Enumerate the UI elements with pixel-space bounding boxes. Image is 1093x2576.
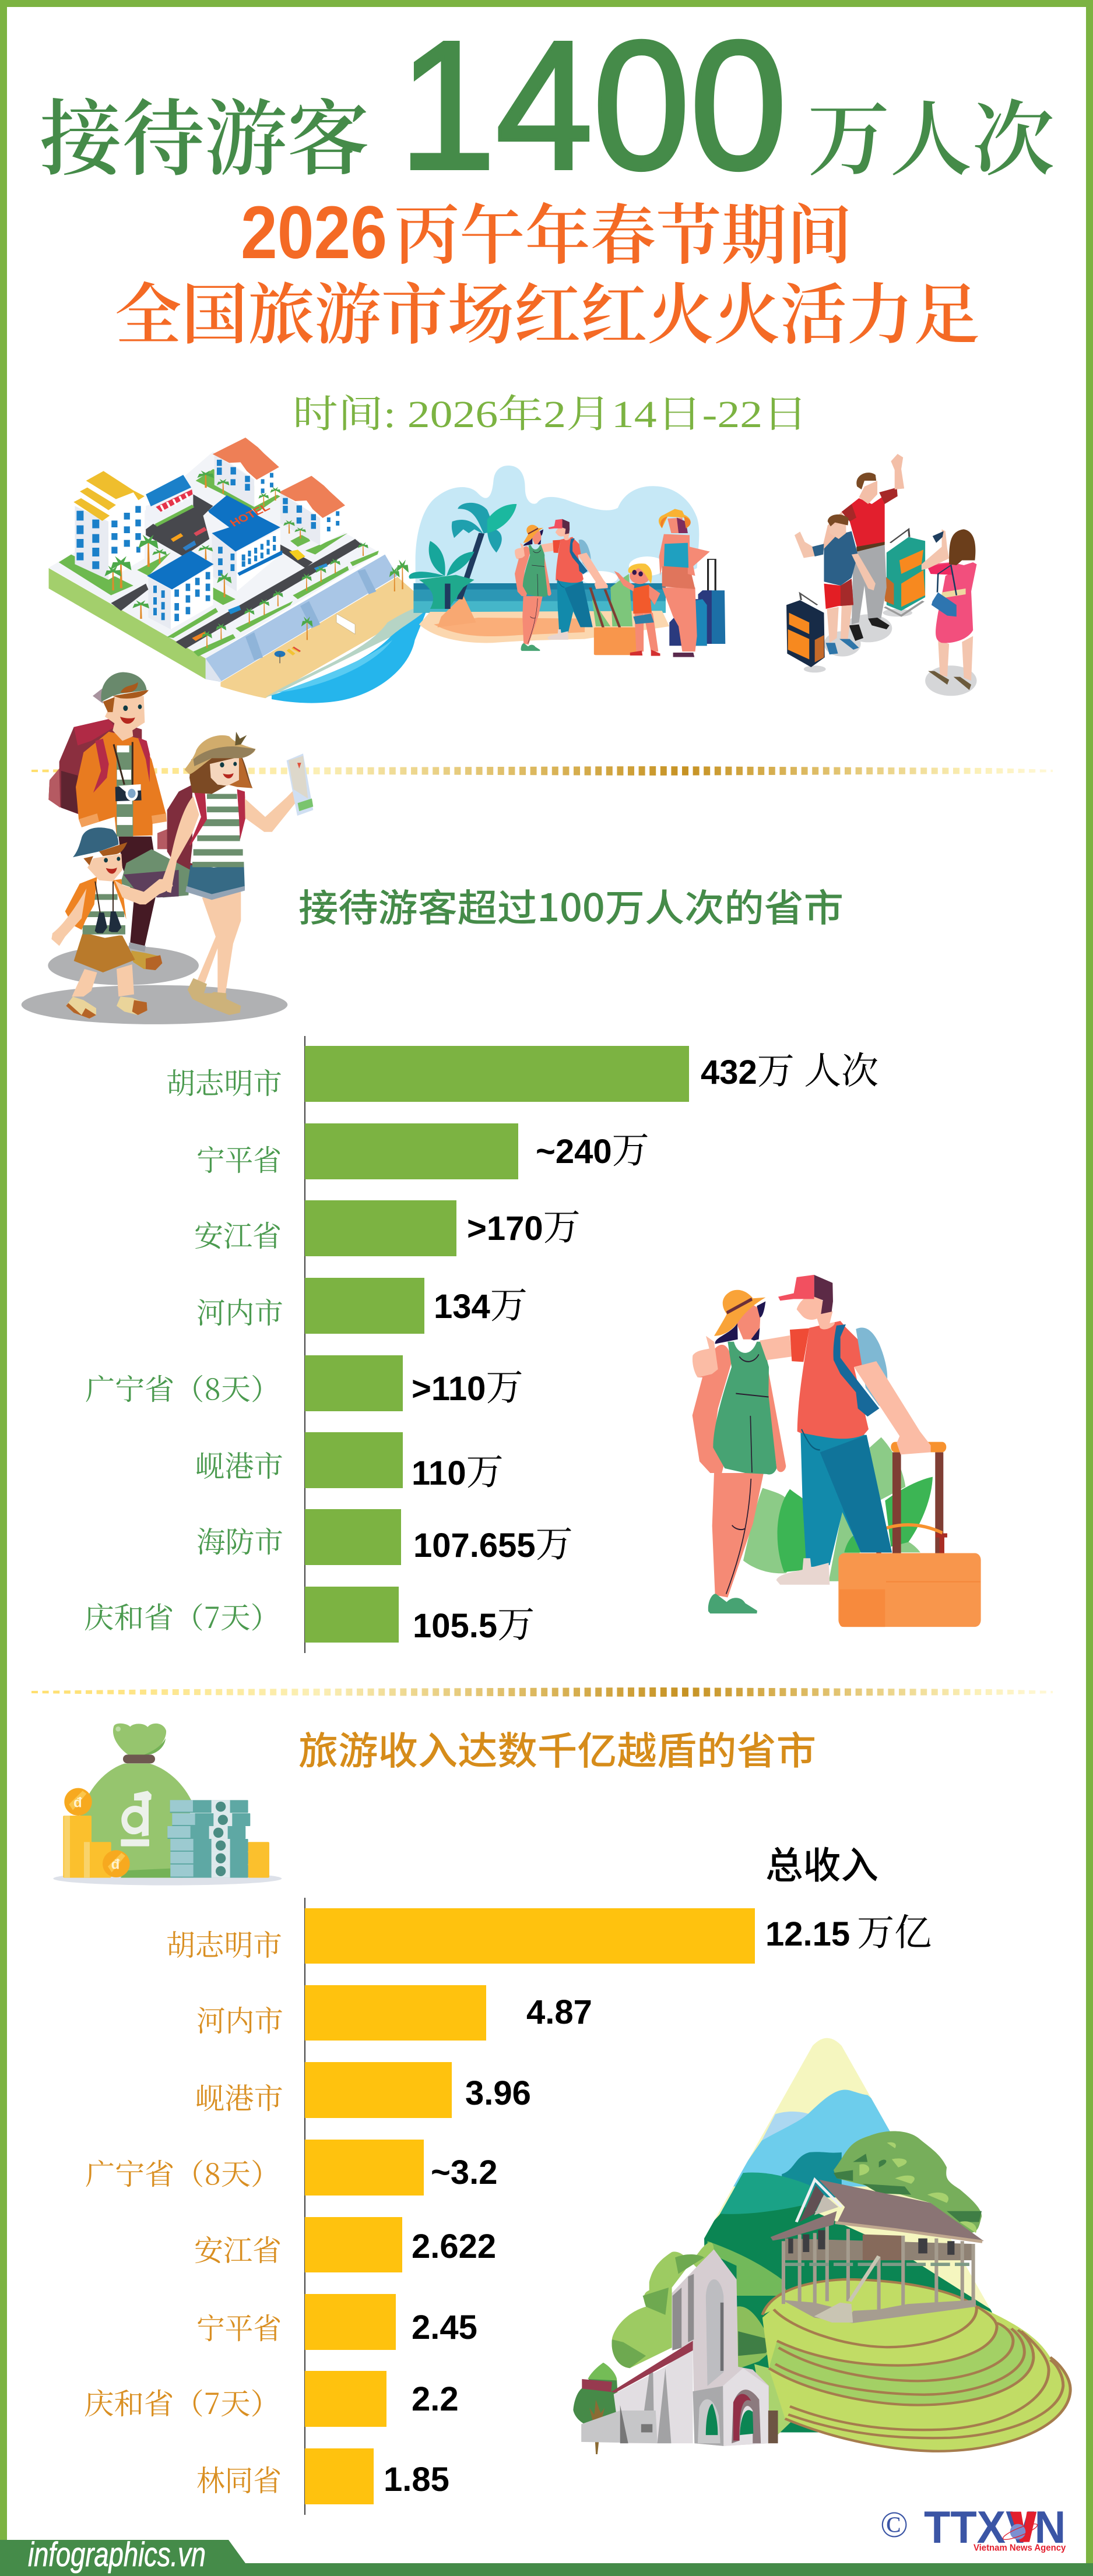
subtitle line one: 2026 [241, 191, 387, 274]
row: 岘港市: 岘港市 [195, 2075, 283, 2117]
subtitle line two: 全国旅游市场红红火火活力足 [115, 262, 980, 357]
title: unit: 万人次 [807, 75, 1055, 192]
date line: 时间: 2026年2月14日-22日 [293, 393, 808, 436]
sand [419, 611, 669, 643]
row: 宁平省 [196, 2294, 477, 2350]
row: 河内市: 河内市 [196, 1998, 283, 2040]
blue roof building [148, 577, 171, 629]
column heading: 总收入 [765, 1836, 878, 1890]
row: 胡志明市: 胡志明市 [166, 1922, 282, 1964]
section heading: visitors: 接待游客超过100万人次的省市 [298, 878, 844, 932]
row: 胡志明市: 胡志明市 [166, 1060, 282, 1102]
bar chart: revenue [84, 1898, 932, 2515]
footer site name: infographics.vn [28, 2536, 206, 2574]
logo: TTXVN: TTXVN [924, 2501, 1066, 2553]
row: 海防市: 海防市 [196, 1519, 283, 1561]
child [51, 827, 173, 1019]
row: 庆和省: 2.2 [412, 2380, 459, 2418]
rice terraces [762, 2279, 1070, 2451]
row: 宁平省: ~240万 [536, 1120, 649, 1174]
row: 海防市: 107.655万 [413, 1514, 573, 1568]
logo: TTXVN: Vietnam News Agency [973, 2543, 1066, 2553]
stilt house [771, 2180, 984, 2323]
row: 河内市 [196, 1985, 592, 2041]
row: 胡志明市 [166, 1903, 932, 1964]
row: 安江省: 安江省 [194, 2228, 282, 2270]
suitcase [838, 1442, 981, 1627]
illustration: money bag: đ [111, 1856, 120, 1872]
title [40, 3, 1055, 207]
row: 广宁省: 广宁省（8天） [85, 1366, 280, 1408]
row: 岘港市 [195, 2062, 531, 2118]
row: 安江省: 2.622 [412, 2228, 496, 2265]
divider [31, 1687, 1053, 1697]
illustration: travellers with suitcases [786, 454, 977, 696]
father [48, 672, 167, 970]
mother [662, 587, 697, 651]
sky [416, 466, 699, 584]
row: 广宁省: ~3.2 [431, 2154, 498, 2191]
row: 庆和省: 庆和省（7天） [84, 2381, 280, 2423]
navy suitcase [786, 600, 825, 667]
illustration: isometric seaside city [49, 438, 427, 703]
palms [138, 535, 159, 567]
illustration: couple with suitcase [693, 1275, 981, 1627]
houses [213, 438, 279, 507]
row: 广宁省: 广宁省（8天） [85, 2151, 280, 2193]
coins [63, 1816, 92, 1878]
row: 胡志明市: 432万 人次 [701, 1041, 878, 1095]
row: 安江省: 安江省 [194, 1213, 282, 1255]
subtitle line one: 丙午年春节期间 [394, 184, 852, 277]
illustration: beach family [409, 466, 725, 657]
illustration: hiking family [22, 672, 313, 1024]
hotel [212, 533, 237, 591]
row: 林同省: 林同省 [196, 2458, 282, 2500]
title: big number: 1400 [399, 3, 787, 207]
row: 庆和省: 庆和省（7天） [84, 1595, 280, 1637]
row: 岘港市 [195, 1432, 504, 1496]
row: 宁平省: 2.45 [412, 2309, 477, 2346]
church [581, 2249, 778, 2446]
row: 岘港市: 110万 [412, 1442, 504, 1496]
row: 胡志明市: 12.15万亿 [765, 1903, 932, 1957]
row: 安江省: >170万 [467, 1197, 581, 1251]
shop [146, 491, 193, 526]
row: 河内市: 河内市 [196, 1290, 283, 1332]
illustration: isometric seaside city: HOTEL [228, 502, 272, 529]
illustration: mountain, stilt house and church [573, 2034, 1070, 2454]
divider [31, 766, 1053, 776]
illustration: money bag: đ [73, 1795, 82, 1811]
row: 林同省: 1.85 [384, 2461, 449, 2499]
plants [592, 574, 632, 626]
couple [515, 519, 608, 651]
beach umbrella and towels [275, 651, 285, 657]
man [852, 545, 887, 625]
trees [573, 2131, 982, 2454]
row: 河内市: 4.87 [526, 1993, 592, 2031]
row: 胡志明市 [166, 1041, 878, 1102]
woman [938, 636, 973, 681]
bar chart: visitors [84, 1036, 878, 1653]
row: 广宁省 [85, 2140, 498, 2196]
orange suitcase [591, 587, 620, 628]
row: 庆和省 [84, 2371, 459, 2427]
mountain [698, 2034, 1005, 2435]
people [693, 1275, 931, 1613]
row: 宁平省: 宁平省 [196, 1137, 282, 1179]
sea [413, 583, 666, 613]
logo: TTXVN: © [880, 2504, 908, 2545]
palm trees [459, 533, 482, 599]
mother [121, 732, 313, 1015]
shadows [48, 946, 199, 985]
row: 广宁省 [85, 1355, 523, 1411]
row: 庆和省 [84, 1587, 535, 1648]
row: 河内市 [196, 1275, 528, 1334]
row: 林同省 [196, 2448, 449, 2504]
title: lead text: 接待游客 [40, 73, 370, 192]
yellow apartment [75, 506, 108, 580]
row: 庆和省: 105.5万 [413, 1595, 535, 1648]
row: 海防市 [196, 1509, 573, 1568]
footer band [0, 2536, 1093, 2576]
cars [171, 533, 183, 542]
banknotes [167, 1800, 250, 1878]
seawall stairs [245, 569, 376, 660]
row: 岘港市: 岘港市 [195, 1443, 283, 1485]
row: 安江省 [194, 1197, 581, 1256]
row: 广宁省: >110万 [412, 1358, 523, 1411]
row: 宁平省 [196, 1120, 649, 1179]
child [634, 613, 658, 651]
boy [827, 603, 852, 643]
illustration: money bag [53, 1724, 282, 1886]
bag [78, 1764, 191, 1878]
row: 安江省 [194, 2217, 496, 2272]
suitcases [708, 559, 715, 593]
row: 河内市: 134万 [434, 1275, 528, 1329]
row: 岘港市: 3.96 [465, 2074, 531, 2112]
leaves [743, 1437, 920, 1581]
row: 宁平省: 宁平省 [196, 2306, 282, 2348]
section heading: revenue: 旅游收入达数千亿越盾的省市 [298, 1720, 816, 1776]
teal suitcase [887, 537, 925, 611]
